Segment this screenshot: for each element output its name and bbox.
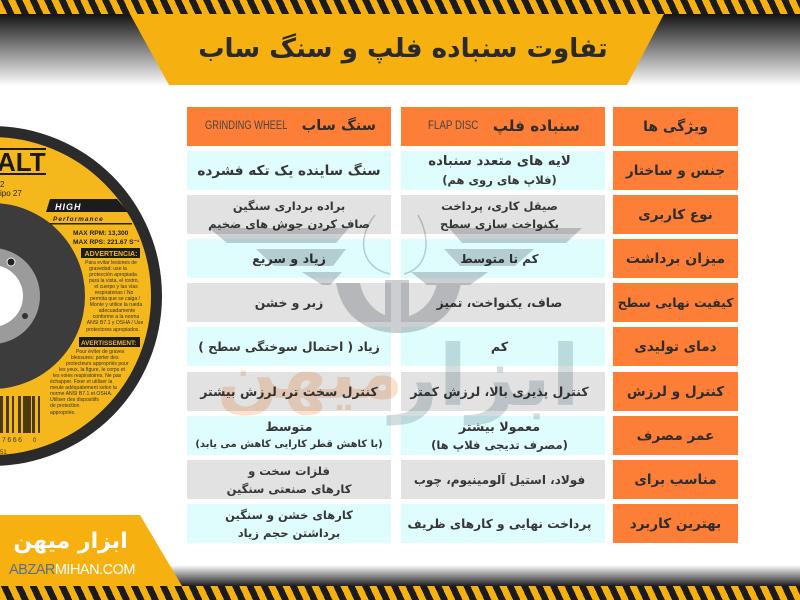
flap disc value [401,504,605,543]
grinding wheel value: زیاد و سریع [252,250,326,266]
High Performance band: Performance [53,216,104,223]
DEWALT brand [0,147,46,198]
flap disc value: فولاد، استیل آلومینیوم، چوب [414,472,585,486]
flap disc value: (مصرف تدیجی فلاپ ها) [431,438,568,452]
grinding wheel value: زبر و خشن [255,294,323,310]
bottom dark gradient band [0,565,800,586]
row: service life [187,416,738,455]
row: final surface quality [187,283,738,322]
warning: French: les yeux, la figure, le corps et [59,367,126,373]
row label [613,283,738,322]
warning: Spanish: Monte y utilice la rueda [90,302,142,308]
High Performance band [46,199,132,224]
row label [613,416,738,455]
header: grinding wheel [187,107,391,146]
warning: French: les voies respiratoires. Ne pas [53,373,122,379]
ratings: MAX RPS: 221.67 S⁻¹ [73,239,139,246]
grinding wheel value [187,195,391,234]
flap disc value: کنترل پذیری بالا، لرزش کمتر [410,384,589,398]
row: generated temperature [187,327,738,366]
grinding wheel value [187,460,391,499]
grinding wheel value: کارهای خشن و سنگین [225,508,353,522]
flap disc value [401,283,605,322]
row: application type [187,195,738,234]
row label: دمای تولیدی [634,338,717,354]
flap disc value [401,372,605,411]
flap disc value [401,151,605,190]
header: flap disc: سنباده فلپ [493,117,580,135]
warning: French: norme ANSI B7.1 et OSHA. [50,391,112,397]
flap disc value: معمولا بیشتر [459,418,540,434]
warning: Spanish: permita que se caiga / [90,296,141,302]
grinding wheel value: برداشتن حجم زیاد [238,526,340,540]
barcode: 7666 [2,437,24,444]
row label: کنترل و لرزش [627,384,724,400]
row label: میزان برداشت [626,250,725,266]
logo website: ABZARMIHAN.COM [9,562,135,578]
row label [613,460,738,499]
warning: French: AVERTISSEMENT: [81,340,136,347]
row: material and structure [187,151,738,190]
row label: نوع کاربری [638,206,713,222]
grinding wheel value [187,151,391,190]
row label [613,504,738,543]
grinding wheel value: کارهای صنعتی سنگین [227,482,351,496]
DEWALT brand: 2 [0,180,5,189]
grinding wheel value [187,327,391,366]
warning: Spanish: para la vista, el rostro, [89,278,139,284]
grinding wheel value: صاف کردن جوش های ضخیم [208,216,370,230]
logo wordmark: ابزار میهن [13,529,128,554]
flap disc value [401,239,605,278]
warning: French [50,337,140,416]
top dark gradient band [0,14,800,86]
grinding wheel value: سنگ ساینده یک تکه فشرده [197,162,381,178]
grinding wheel value: (با کاهش قطر کارایی کاهش می یابد) [195,438,383,450]
warning: Spanish: respiratorias / No [95,290,134,296]
warning: Spanish: gravedad: use la [89,266,127,272]
warning: French: protecteurs appropriés pour [66,361,129,367]
title: تفاوت سنباده فلپ و سنگ ساب [198,34,608,64]
header: flap disc [401,107,605,146]
header: grinding wheel: سنگ ساب [302,118,376,134]
High Performance band: HIGH [55,202,82,212]
warning: Spanish: ADVERTENCIA: [85,251,137,258]
warning: French: de protection [50,403,80,409]
row: best use [187,504,738,543]
warning: Spanish: el cuerpo y las vías [94,284,138,290]
grinding wheel value: فلزات سخت و [248,464,330,478]
header: grinding wheel: GRINDING WHEEL [205,120,287,132]
ratings [73,230,139,246]
flap disc value: لایه های متعدد سنباده [428,154,571,168]
warning: Spanish: protectores apropiados. [86,327,140,333]
row label [613,239,738,278]
grinding wheel value [187,416,391,455]
grinding wheel value [187,372,391,411]
flap disc value: کم تا متوسط [460,252,539,266]
logo badge [0,515,182,586]
grinding wheel value: کنترل سخت تر، لرزش بیشتر [200,384,378,398]
row: removal rate [187,239,738,278]
header: flap disc: FLAP DISC [428,120,478,132]
warning: French: meule adéquatement selon la [50,385,117,391]
row label: کیفیت نهایی سطح [618,294,733,310]
warning: Spanish [81,248,143,333]
row label: مناسب برای [634,472,717,488]
flap disc value: صیقل کاری، پرداخت [441,198,558,212]
flap disc value [401,195,605,234]
row: suitable for [187,460,738,499]
warning: French: échapper. Fixer et utiliser la [50,379,112,385]
barcode: 0 [33,438,37,444]
flap disc value: صاف، یکنواخت، تمیز [437,294,562,310]
grinding wheel value [187,504,391,543]
warning: Spanish: ANSI B7.1 y OSHA / Use [87,320,143,326]
row label [613,151,738,190]
grinding wheel value: براده برداری سنگین [233,198,345,212]
watermark logo: میهن [217,331,403,416]
flap disc value: پرداخت نهایی و کارهای ظریف [408,516,591,530]
grinding wheel value: متوسط [265,418,313,434]
warning: Spanish: conforme a la norma [93,314,140,320]
header: features: ویژگی ها [643,118,708,134]
DEWALT brand: ipo 27 [0,189,22,198]
row label [613,195,738,234]
flap disc value [401,460,605,499]
grinding wheel value [187,239,391,278]
warning: French: Pour éviter de graves [76,349,125,355]
flap disc value [401,416,605,455]
watermark logo: ابزار [386,327,580,426]
warning: French: blessures: porter des [71,355,119,361]
row label: جنس و ساختار [626,162,725,178]
row: control and vibration [187,372,738,411]
warning: Spanish: Para evitar lesiones de [85,260,137,266]
header: features [613,107,738,146]
row label: عمر مصرف [637,428,714,444]
flap disc value: یکنواخت سازی سطح [440,216,559,230]
grinding wheel value [187,283,391,322]
warning: French: appropriés. [50,410,75,416]
flap disc value: کم [491,338,508,354]
flap disc value: (فلاپ های روی هم) [442,172,557,186]
barcode [0,396,40,456]
warning: French: Utiliser des dispositifs [50,397,99,403]
title banner [130,14,664,85]
barcode: 51 [0,450,7,456]
row label [613,372,738,411]
grinding wheel value: زیاد ( احتمال سوختگی سطح ) [198,340,380,354]
row label: بهترین کاربرد [630,516,721,532]
bottom hazard stripes [0,586,800,600]
product image: grinding disc [0,126,162,466]
warning: Spanish: protección apropiada [89,272,137,278]
warning: Spanish: adecuadamente [99,308,135,314]
ratings: MAX RPM: 13,300 [73,230,129,237]
flap disc value [401,327,605,366]
top hazard stripes [0,0,800,14]
row label [613,327,738,366]
